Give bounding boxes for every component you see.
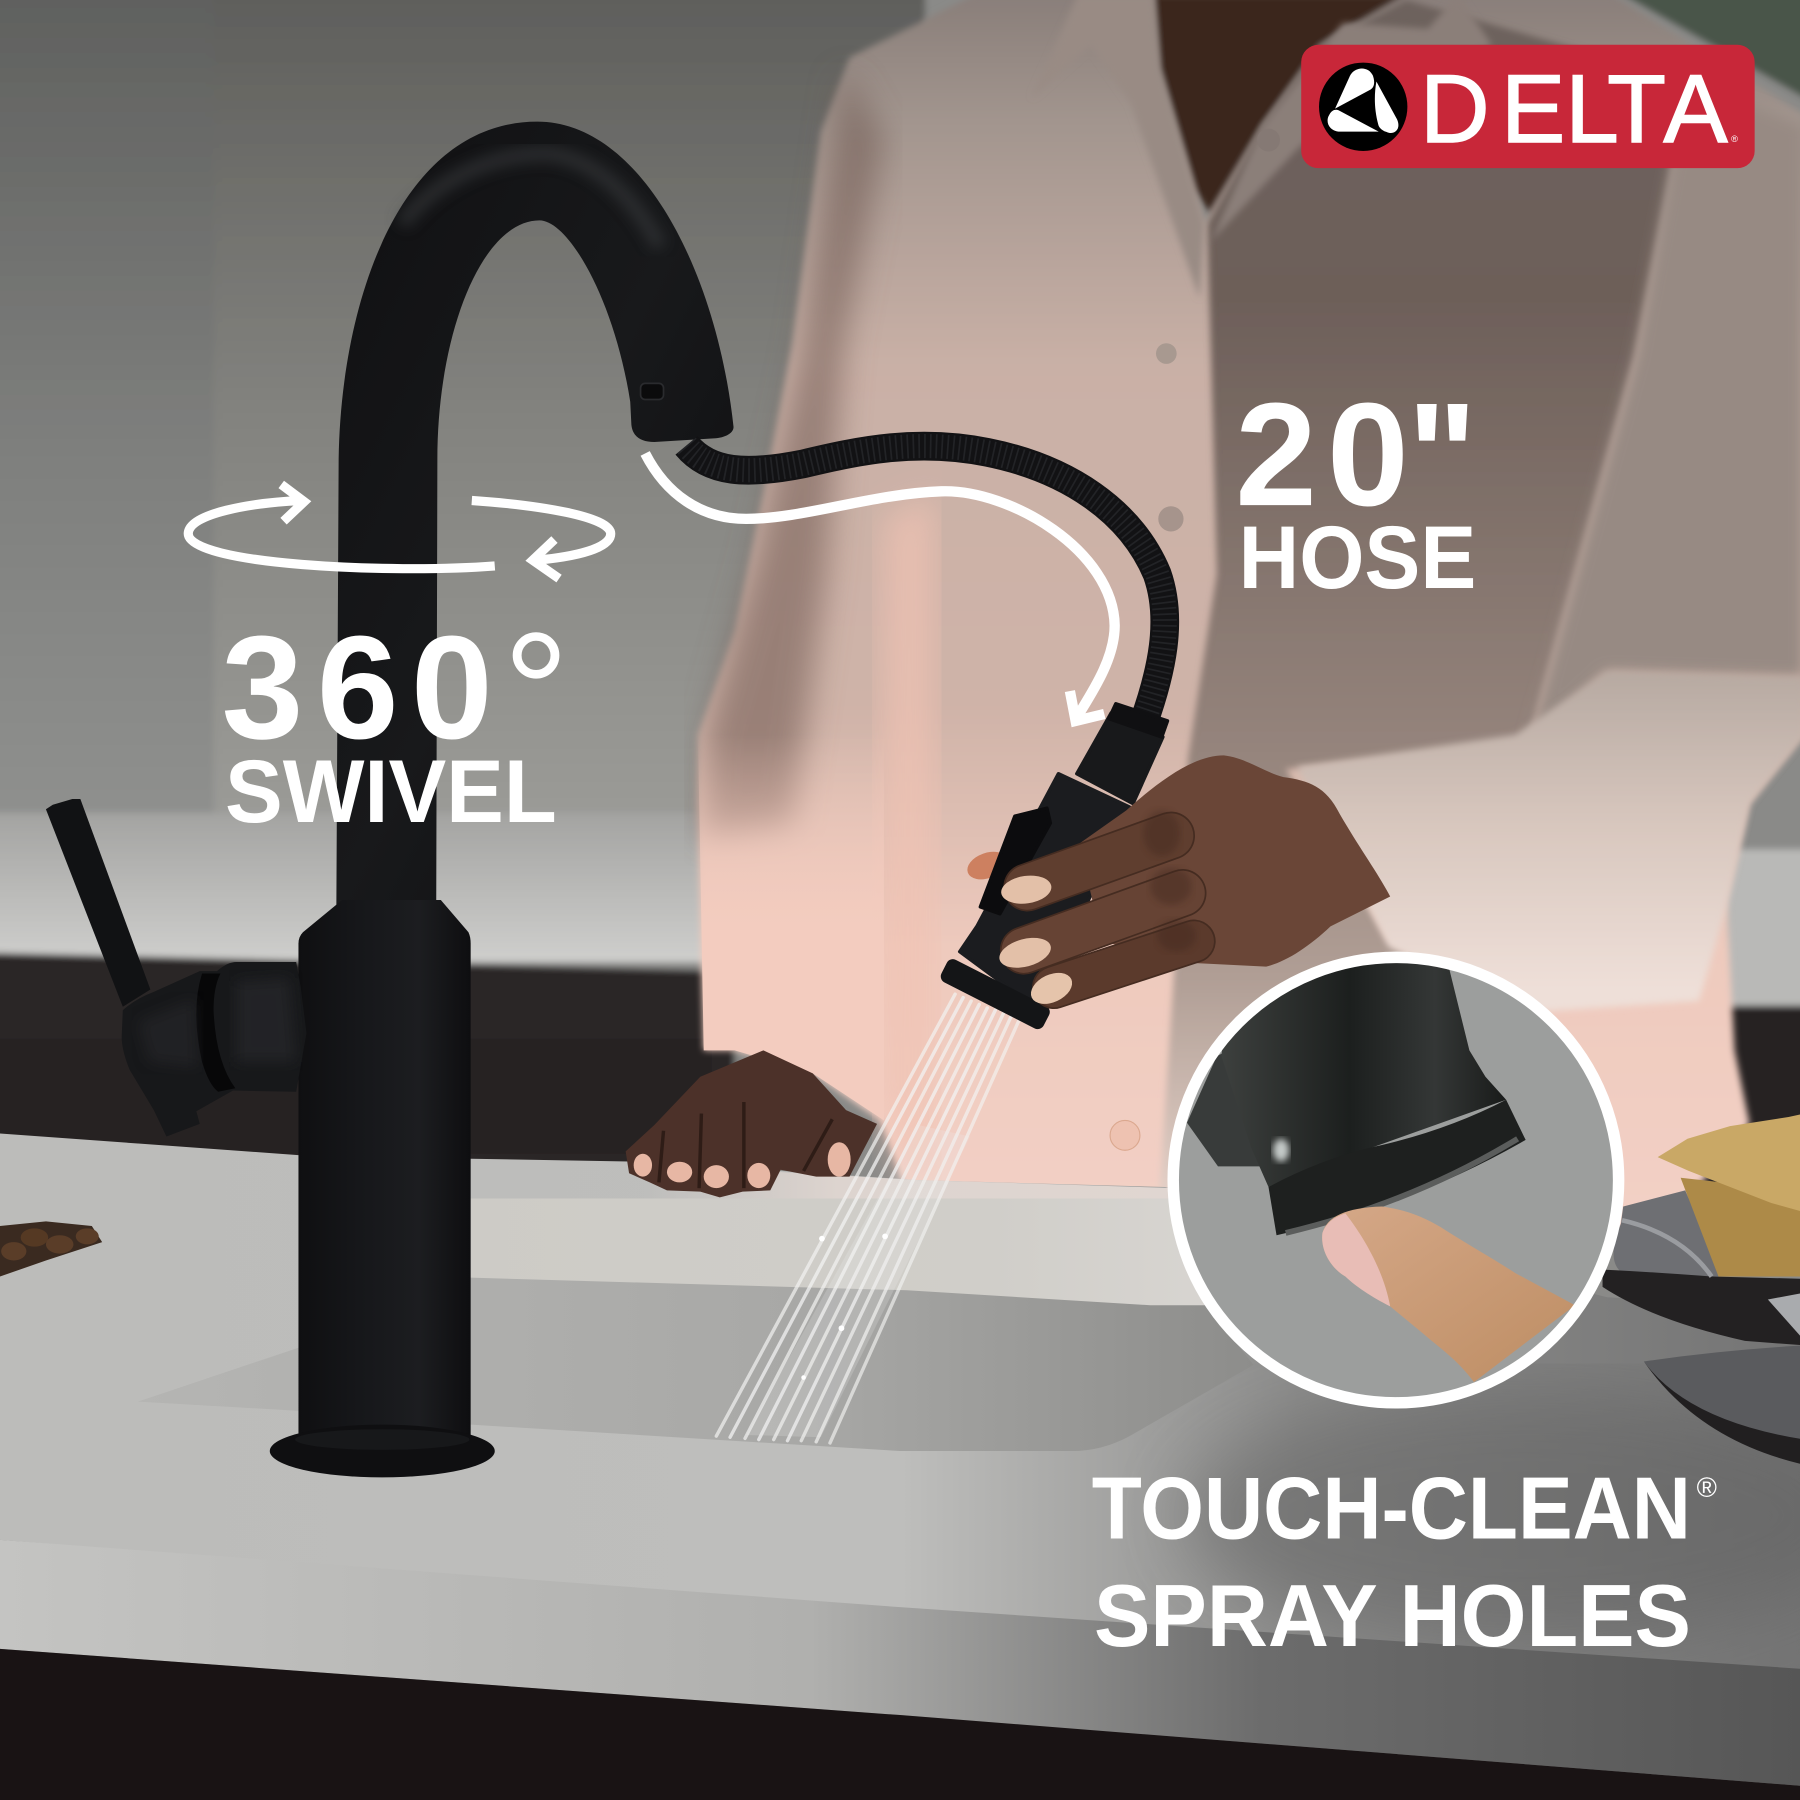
faucet body bbox=[298, 900, 471, 1442]
label: touch-clean spray holes: SPRAY HOLES bbox=[1094, 1566, 1691, 1665]
shirt base bbox=[697, 0, 1800, 1228]
front countertop and sink bbox=[0, 1133, 1800, 1800]
neck bbox=[1131, 0, 1406, 224]
knuckles bbox=[1143, 810, 1180, 856]
pie crust bbox=[1658, 1114, 1800, 1212]
hand back bbox=[1079, 755, 1390, 967]
back fingertip bbox=[964, 847, 1011, 884]
handle joint bbox=[122, 962, 307, 1136]
inset head brim bbox=[1268, 1100, 1526, 1235]
plate surface bbox=[1614, 1190, 1722, 1277]
shirt buttons bbox=[1110, 129, 1280, 1150]
fingernails bbox=[999, 873, 1053, 907]
fingers bbox=[1024, 836, 1194, 987]
water spray bbox=[716, 994, 1019, 1443]
callout: touch-clean inset bbox=[1173, 953, 1619, 1403]
counter top surface bbox=[0, 1133, 1800, 1676]
shirt upper right sleeve bbox=[1527, 80, 1800, 746]
shirt collar left bbox=[1032, 0, 1204, 298]
shirt cuff bbox=[1297, 672, 1800, 1012]
label: 360 degree swivel: SWIVEL bbox=[225, 741, 557, 841]
shirt pink placket stripe bbox=[878, 494, 936, 1182]
spray head body bbox=[960, 774, 1130, 1010]
spray head connector bbox=[1077, 713, 1163, 804]
sink basin bbox=[138, 1278, 1254, 1451]
sink rim bbox=[459, 1198, 1219, 1423]
inset fingernail bbox=[1322, 1213, 1390, 1306]
spoon bbox=[1622, 1220, 1712, 1277]
shirt collar right bbox=[1211, 0, 1492, 241]
faucet bbox=[46, 122, 734, 1477]
inset spray head bbox=[1221, 953, 1506, 1187]
handle lever bbox=[46, 799, 150, 1007]
shirt right panel bbox=[1159, 0, 1688, 1194]
label: 360 degree swivel: ° bbox=[503, 598, 569, 784]
logo: Delta: DELTA bbox=[1420, 56, 1728, 163]
icon: tri-petal mark bbox=[1328, 68, 1398, 133]
label: 20 inch hose: 20" bbox=[1235, 373, 1477, 537]
left sleeve bbox=[698, 735, 884, 1120]
pie filling bbox=[1681, 1178, 1800, 1277]
plate rim bbox=[1603, 1270, 1800, 1345]
lower cabinet bbox=[0, 1648, 1800, 1800]
lower plate bbox=[1644, 1345, 1800, 1465]
serving spoon bbox=[1768, 1293, 1800, 1341]
logo: Delta: ® bbox=[1731, 134, 1738, 144]
counter front edge bbox=[0, 1539, 1800, 1786]
logo: Delta bbox=[1301, 45, 1755, 168]
faucet base bbox=[270, 1425, 495, 1477]
pie on plates bbox=[1603, 1114, 1800, 1465]
left hand on counter bbox=[626, 1050, 877, 1197]
inset spray clip bbox=[1187, 1054, 1260, 1166]
shirt left arm shading bbox=[703, 69, 884, 838]
label: touch-clean spray holes bbox=[1092, 1458, 1717, 1665]
pull-down hose bbox=[686, 445, 1165, 723]
arrow: swivel rotation bbox=[188, 484, 611, 579]
label: touch-clean spray holes: ® bbox=[1697, 1472, 1717, 1503]
label: 20 inch hose: HOSE bbox=[1239, 507, 1476, 607]
person in pink shirt bbox=[697, 0, 1800, 1228]
arrow: hose reach bbox=[645, 453, 1115, 721]
label: 360 degree swivel: 360 bbox=[222, 606, 493, 770]
right hand and spray head bbox=[938, 704, 1390, 1031]
spray lever clip bbox=[980, 808, 1050, 914]
coffee beans bbox=[0, 1221, 102, 1277]
inset finger bbox=[1322, 1207, 1575, 1382]
label: touch-clean spray holes: TOUCH-CLEAN bbox=[1092, 1458, 1691, 1557]
label: 360 degree swivel bbox=[222, 598, 569, 841]
spray head disc bbox=[938, 957, 1052, 1031]
faucet spout bbox=[336, 122, 734, 907]
